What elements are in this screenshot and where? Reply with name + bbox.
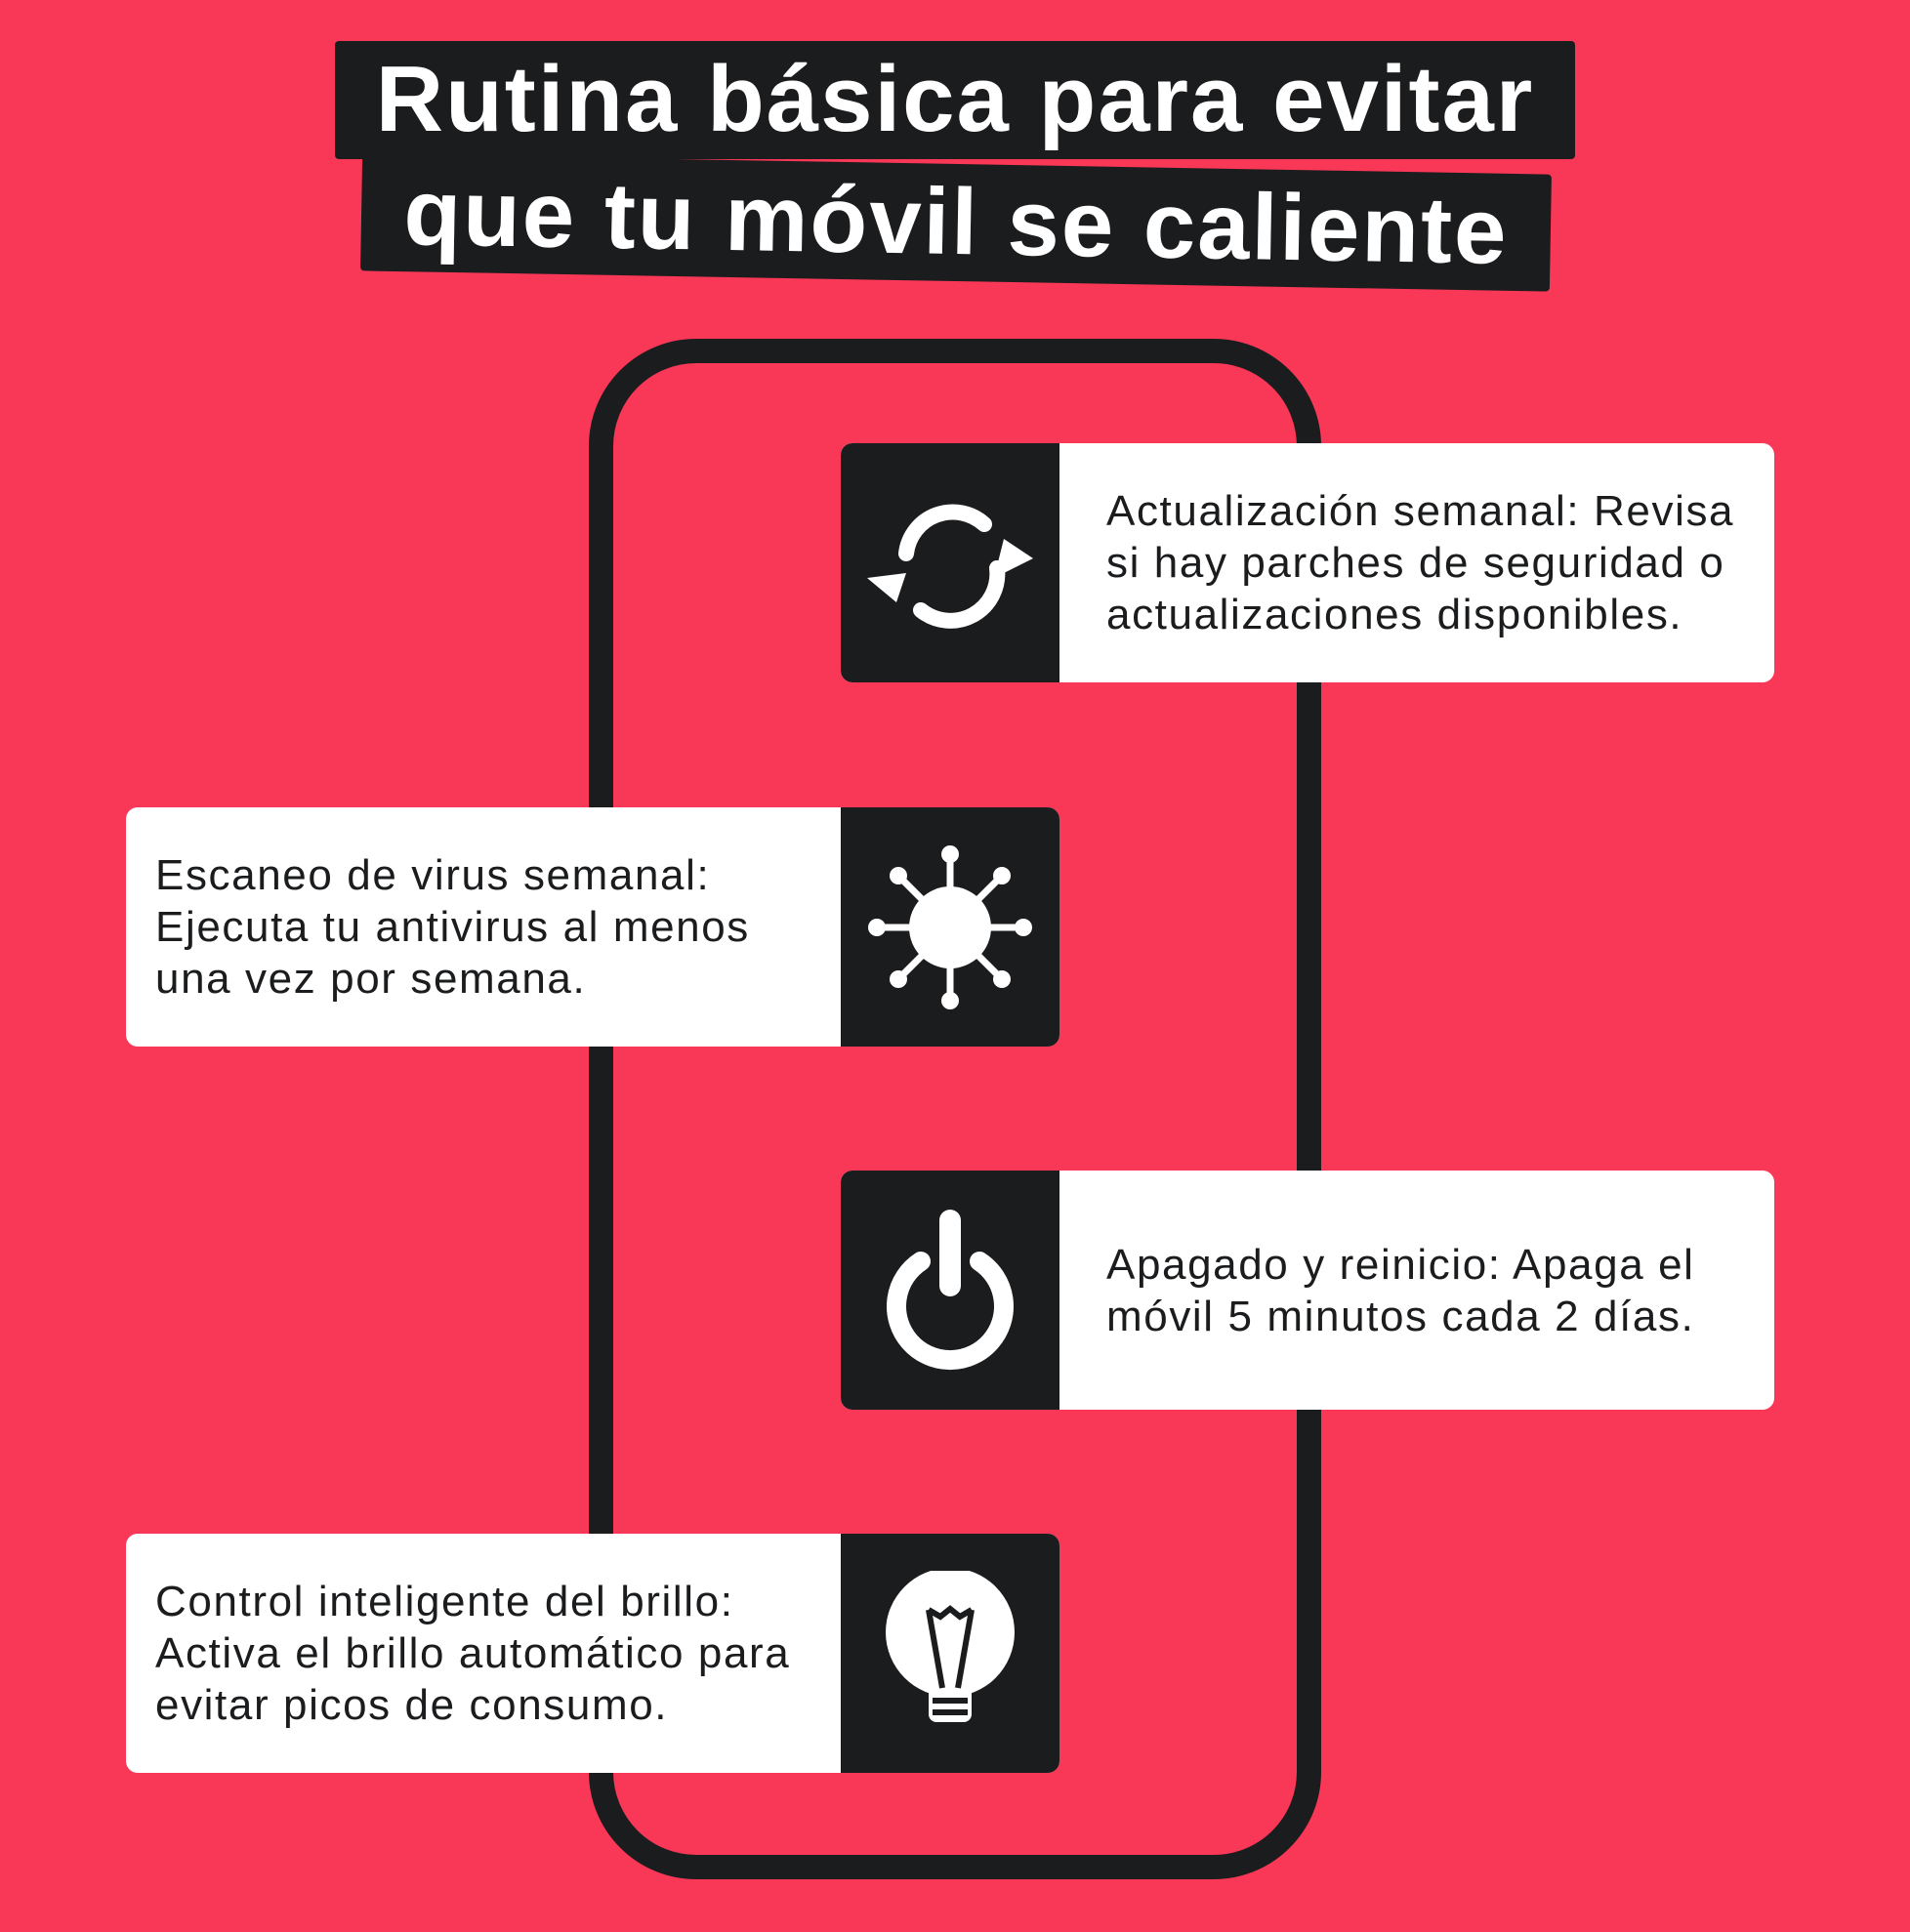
icon: virus	[841, 807, 1059, 1047]
text	[155, 1578, 790, 1729]
text: móvil 5 minutos cada 2 días.	[1106, 1293, 1694, 1339]
icon: power	[841, 1171, 1059, 1410]
text	[1106, 1240, 1695, 1339]
text: una vez por semana.	[155, 955, 586, 1003]
text	[155, 851, 750, 1003]
text: Apagado y reinicio: Apaga el	[1106, 1240, 1695, 1289]
text: actualizaciones disponibles.	[1106, 591, 1682, 638]
title line 1: Rutina básica para evitar	[376, 47, 1534, 151]
card 4: brightness	[126, 1534, 1059, 1773]
text: evitar picos de consumo.	[155, 1681, 668, 1729]
text: Escaneo de virus semanal:	[155, 851, 710, 899]
text: Ejecuta tu antivirus al menos	[155, 903, 750, 951]
icon: refresh	[841, 443, 1059, 682]
icon: bulb	[841, 1534, 1059, 1773]
title line 2: que tu móvil se caliente	[403, 160, 1509, 284]
card 1: updates	[841, 443, 1774, 682]
phone outline	[589, 339, 1321, 1879]
card 2: virus scan	[126, 807, 1059, 1047]
text: Activa el brillo automático para	[155, 1629, 790, 1677]
text	[1106, 487, 1734, 638]
card 3: power	[841, 1171, 1774, 1410]
text: Control inteligente del brillo:	[155, 1578, 734, 1625]
text: si hay parches de seguridad o	[1106, 539, 1724, 587]
text: Actualización semanal: Revisa	[1106, 487, 1734, 535]
